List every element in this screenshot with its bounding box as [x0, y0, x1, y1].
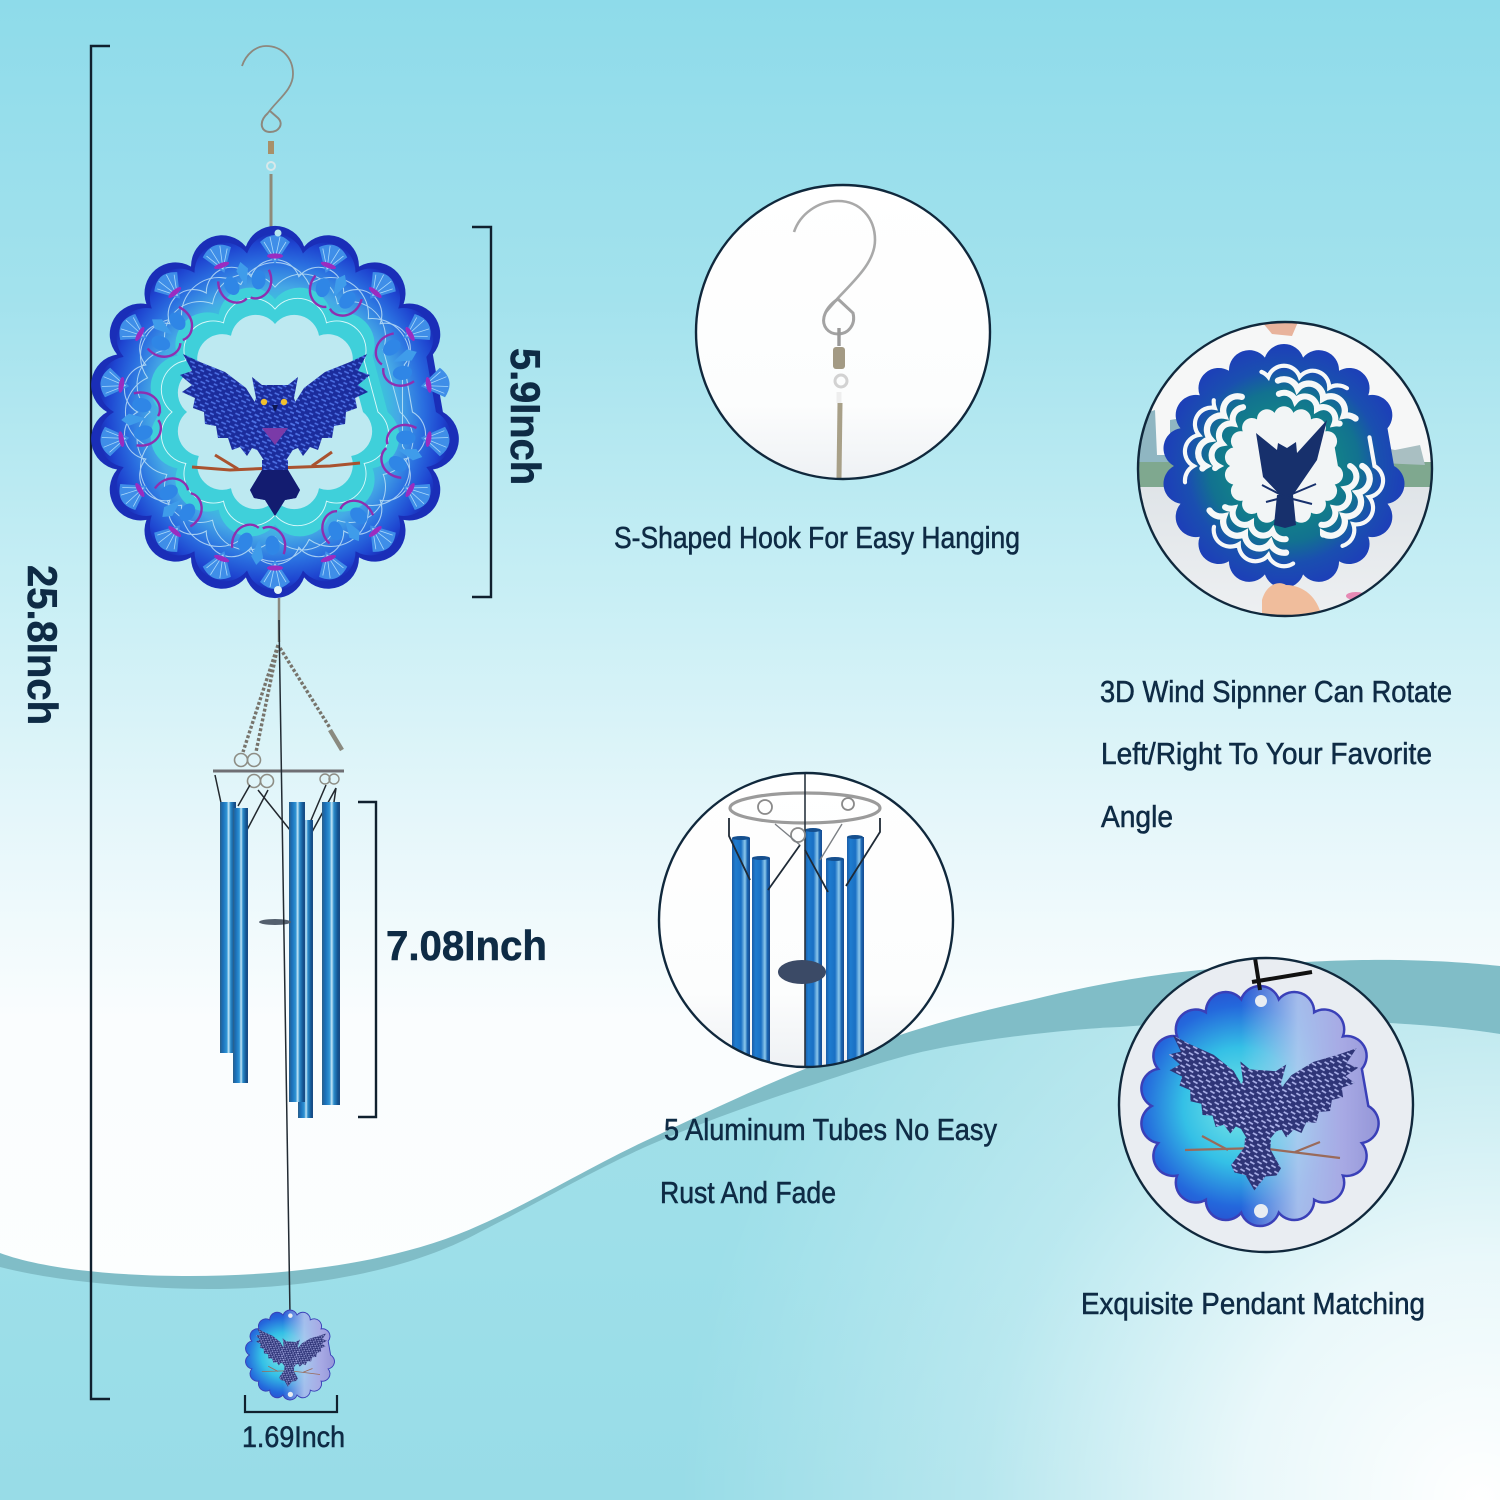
wind chime product [91, 46, 459, 1400]
caption: tubes: 5 Aluminum Tubes No Easy [664, 1112, 997, 1147]
dimension: tube bracket [358, 802, 376, 1117]
mandala lobes [98, 235, 452, 589]
main owl spinner [91, 226, 459, 598]
leaf clusters [120, 256, 430, 568]
circle: tubes detail [659, 773, 953, 1080]
cord [1252, 958, 1312, 990]
caption: 3D spinner: Angle [1101, 799, 1173, 834]
caption: tubes: Rust And Fade [660, 1175, 836, 1210]
circle: S-hook detail [696, 185, 990, 479]
dimension: total height bracket [91, 46, 110, 1399]
label: 25.8Inch: 25.8Inch [19, 565, 66, 725]
owl on branch [180, 354, 370, 516]
caption: hook: S-Shaped Hook For Easy Hanging [614, 520, 1020, 555]
caption: 3D spinner [1100, 674, 1452, 834]
dimension: pendant bracket [245, 1395, 337, 1412]
fingers [1262, 322, 1366, 620]
circle: 3D spinner photo [1138, 322, 1432, 620]
chains and ring [213, 598, 344, 832]
caption: pendant: Exquisite Pendant Matching [1081, 1286, 1425, 1321]
circle: pendant detail [1119, 958, 1413, 1252]
3D spinner [1163, 344, 1405, 588]
dimension: spinner bracket [472, 227, 491, 597]
clapper and string [259, 620, 291, 1315]
icon: S hook [794, 201, 875, 478]
hook [242, 46, 293, 228]
caption: 3D spinner: Left/Right To Your Favorite [1101, 736, 1432, 771]
aluminum tubes [220, 802, 340, 1118]
pendant disc [1141, 986, 1379, 1226]
caption: tubes [660, 1112, 997, 1210]
tubes closeup [732, 828, 864, 1080]
owl silhouette [1256, 420, 1327, 528]
label: 7.08Inch: 7.08Inch [386, 922, 547, 969]
caption: 3D spinner: 3D Wind Sipnner Can Rotate [1100, 674, 1452, 709]
clapper [778, 960, 826, 984]
label: 5.9Inch: 5.9Inch [502, 348, 549, 485]
photo backdrop [1138, 410, 1432, 620]
small pendant [246, 1310, 334, 1400]
label: 1.69Inch: 1.69Inch [242, 1421, 345, 1454]
ring and wires [729, 773, 880, 1067]
